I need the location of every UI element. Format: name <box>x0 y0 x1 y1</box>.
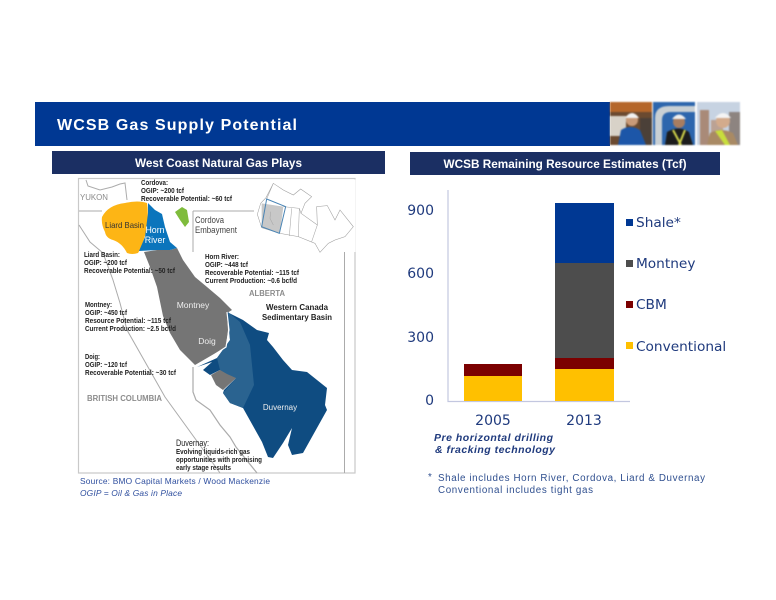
play outline <box>197 312 229 366</box>
footnote: * <box>428 472 432 483</box>
bar: 2013 <box>555 203 614 401</box>
map label: Cordova Embayment: Embayment <box>195 225 237 235</box>
annotation: pre horizontal drilling: Pre horizontal drilling <box>434 432 554 444</box>
note: Cordova: OGIP: ~200 tcf <box>141 188 185 195</box>
map label: Cordova Embayment: Cordova <box>195 215 224 225</box>
play: Doig south tongue <box>211 370 236 390</box>
map borders <box>79 180 344 473</box>
play: Liard Basin <box>102 202 148 254</box>
note: Liard Basin: Liard Basin: <box>84 252 120 259</box>
note: Horn River: Recoverable Potential: ~115 tcf <box>205 270 300 277</box>
left panel heading: West Coast Natural Gas Plays <box>135 156 302 170</box>
note: Cordova <box>141 180 233 203</box>
map label: Montney: Montney <box>177 300 210 310</box>
axes <box>448 190 630 402</box>
map label: Horn River <box>145 225 165 245</box>
map label: Duvernay: Duvernay <box>263 403 297 412</box>
legend: Conventional <box>636 339 726 355</box>
footnote: Conventional includes tight gas <box>438 485 593 496</box>
map label: Liard Basin: Liard Basin <box>105 220 144 230</box>
note: Montney: OGIP: ~450 tcf <box>85 310 128 317</box>
source note: OGIP = Oil & Gas in Place <box>80 488 182 498</box>
legend: Montney <box>636 256 695 272</box>
play: Montney and Doig <box>144 248 232 365</box>
annotation: pre horizontal drilling: & fracking technology <box>435 444 556 456</box>
map label: Horn River: Horn <box>145 225 165 235</box>
panel: gas plays map <box>78 178 355 473</box>
note: Horn River: OGIP: ~448 tcf <box>205 262 249 269</box>
map label: Horn River: River <box>145 235 165 245</box>
map label: Western Canada Sedimentary Basin: Western Canada <box>266 303 329 312</box>
note: Duvernay <box>176 438 262 472</box>
title banner <box>35 102 610 146</box>
note: Liard Basin <box>84 252 176 275</box>
x axis labels <box>475 413 602 429</box>
note: Cordova: Cordova: <box>141 180 168 187</box>
map label: British Columbia: BRITISH COLUMBIA <box>87 394 162 403</box>
annotation: pre horizontal drilling <box>434 432 556 456</box>
footnote: Shale includes Horn River, Cordova, Liard & Duvernay <box>438 473 705 484</box>
y axis labels: 300 <box>407 330 434 346</box>
note: Montney: Current Production: ~2.5 bcf/d <box>85 326 176 333</box>
map label: Cordova Embayment <box>195 215 237 235</box>
note: Horn River: Current Production: ~0.6 bcf/d <box>205 278 297 285</box>
map label: Doig: Doig <box>198 336 216 346</box>
note: Duvernay: opportunities with promising <box>176 457 262 464</box>
play: Horn River <box>139 203 177 251</box>
y axis labels: 0 <box>425 393 434 409</box>
legend: Shale* <box>636 215 681 231</box>
note: Duvernay: Duvernay: <box>176 438 209 448</box>
play: Duvernay overlap <box>217 312 254 408</box>
note: Cordova: Recoverable Potential: ~60 tcf <box>141 196 233 203</box>
note: Horn River: Horn River: <box>205 254 239 261</box>
legend <box>626 215 726 355</box>
note: Liard Basin: Recoverable Potential: ~50 tcf <box>84 268 176 275</box>
x axis labels: 2005 <box>475 413 511 429</box>
source note: Source: BMO Capital Markets / Wood Mackenzie <box>80 476 270 486</box>
stacked bar chart <box>407 190 726 429</box>
y axis labels: 600 <box>407 266 434 282</box>
right panel heading <box>410 152 720 175</box>
y axis labels <box>407 203 434 409</box>
note: Montney <box>85 302 176 333</box>
play: Duvernay <box>197 312 327 458</box>
source note <box>80 476 270 498</box>
play: Cordova green <box>175 207 189 227</box>
note: Montney: Resource Potential: ~115 tcf <box>85 318 172 325</box>
bar: 2005 <box>464 364 522 401</box>
title: WCSB Gas Supply Potential <box>57 117 297 134</box>
right panel heading: WCSB Remaining Resource Estimates (Tcf) <box>444 157 687 171</box>
note: Montney: Montney: <box>85 302 112 309</box>
note: Doig <box>85 354 177 377</box>
note: Doig: OGIP: ~120 tcf <box>85 362 128 369</box>
banner photos <box>610 102 740 145</box>
note: Horn River <box>205 254 300 285</box>
note: Duvernay: Evolving liquids-rich gas <box>176 449 250 456</box>
map label: Western Canada Sedimentary Basin <box>262 303 332 322</box>
x axis labels: 2013 <box>566 413 602 429</box>
note: Duvernay: early stage results <box>176 465 231 472</box>
y axis labels: 900 <box>407 203 434 219</box>
note: Doig: Recoverable Potential: ~30 tcf <box>85 370 177 377</box>
map label: Western Canada Sedimentary Basin: Sedimentary Basin <box>262 313 332 322</box>
legend: CBM <box>636 297 667 313</box>
left panel heading <box>52 151 385 174</box>
note: Doig: Doig: <box>85 354 100 361</box>
inset map of Canada <box>254 180 355 252</box>
footnote <box>428 472 705 496</box>
note: Liard Basin: OGIP: ~200 tcf <box>84 260 128 267</box>
map label: Yukon: YUKON <box>80 192 108 202</box>
map label: Alberta: ALBERTA <box>249 289 285 298</box>
